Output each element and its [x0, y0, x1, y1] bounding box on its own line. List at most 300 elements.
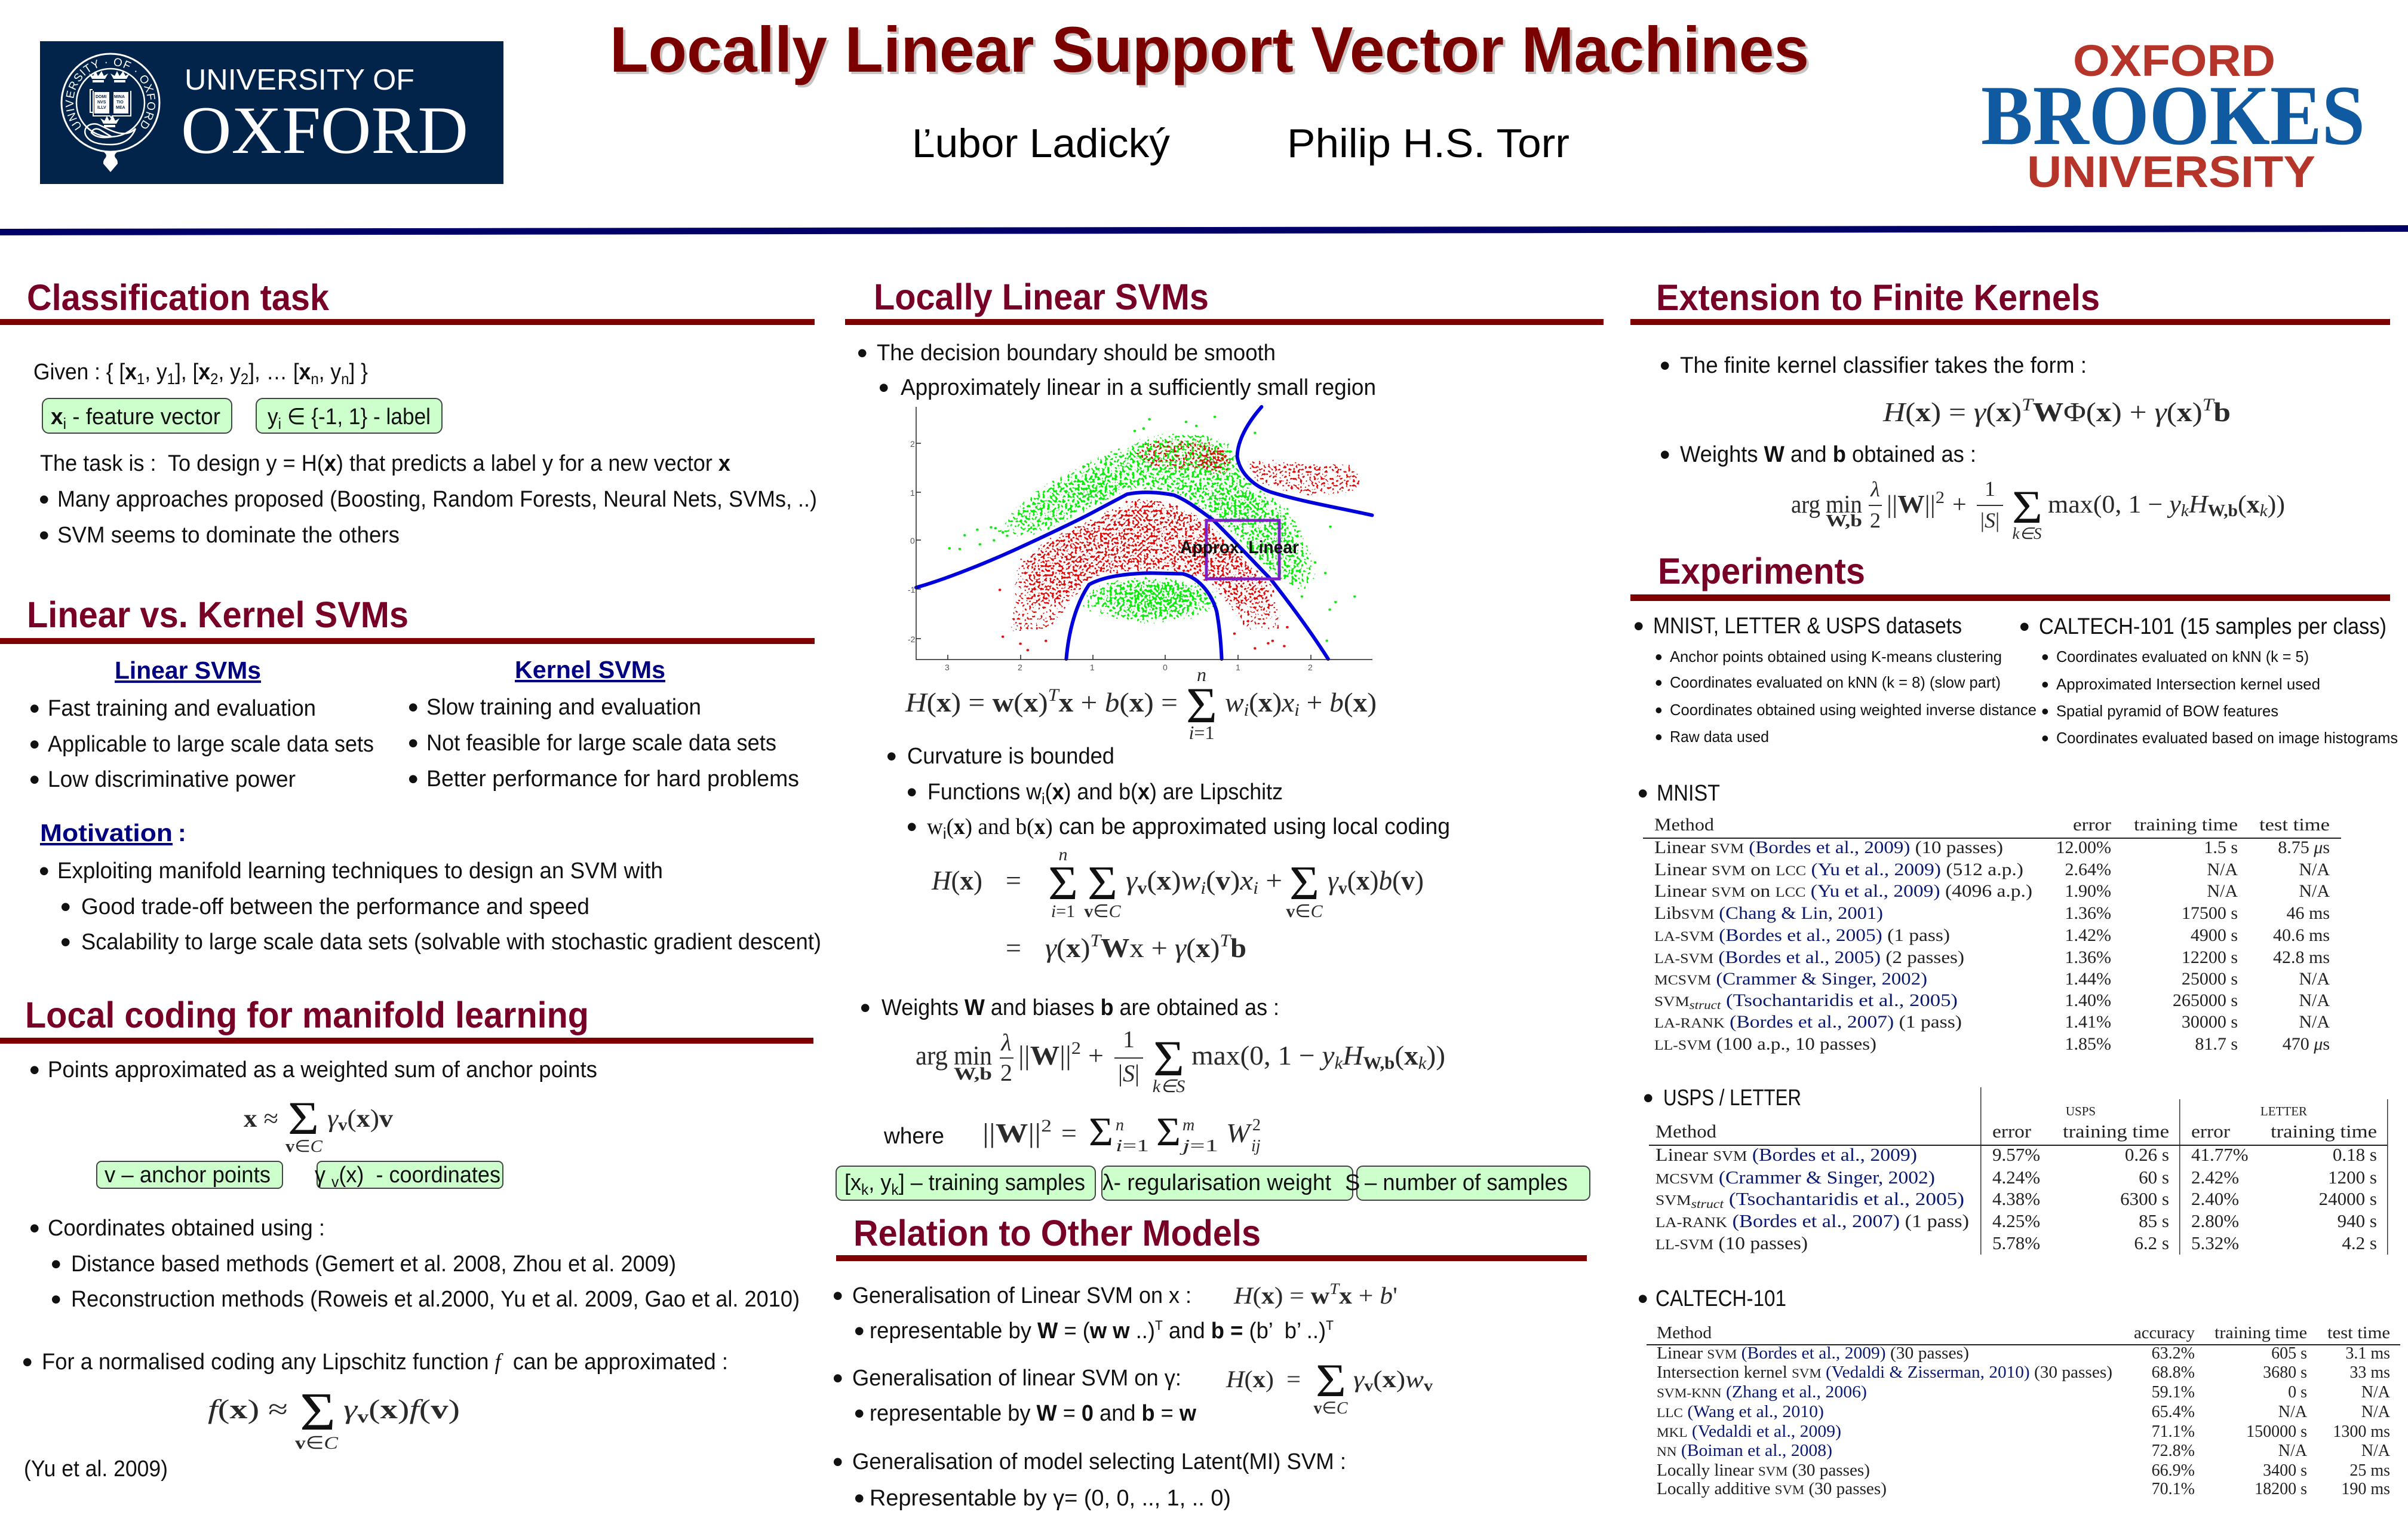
table: USPS and LETTER results: 2.40%	[2191, 1188, 2239, 1209]
formula: x approx: Σ	[288, 1092, 319, 1144]
formula: H(x) local coding: =	[1006, 933, 1021, 963]
formula: H(x) local coding: n	[1058, 845, 1068, 864]
formula: H(x) local coding: Σ	[1048, 857, 1078, 910]
formula: H(x) locally linear: i	[1244, 700, 1249, 720]
column: Kernel SVMs: •	[408, 726, 419, 760]
list: MNIST, LETTER and USPS datasets: Coordinates evaluated on kNN (k = 8) (slow part)	[1670, 673, 2001, 691]
given data text: ] }	[349, 360, 368, 385]
table: CALTECH-101 results: training time	[2214, 1324, 2307, 1342]
column: Kernel SVMs	[408, 656, 799, 796]
formula: objective: ||W||	[1018, 1040, 1071, 1071]
item: latent SVM: •	[833, 1445, 843, 1479]
chart: scatter plot with decision boundary: 0	[1163, 663, 1168, 672]
item: linear SVM on x: T	[1155, 1318, 1163, 1333]
bullets: curvature: i	[943, 824, 947, 842]
formula: H(x) locally linear: i=1	[1189, 722, 1214, 743]
bullets: curvature: i	[1042, 790, 1045, 808]
bullet: normalised coding: For a normalised coding any Lipschitz function f can be approximated :	[42, 1350, 728, 1375]
motivation	[39, 819, 821, 959]
formula: H(x) local coding: v	[1338, 878, 1347, 898]
formula: x approx: v	[338, 1116, 347, 1134]
formula: norm definition: Σ	[1089, 1109, 1113, 1154]
formula: H(x) local coding: x + γ(x)	[1129, 933, 1220, 963]
item: linear SVM on gamma: x)w	[1383, 1366, 1421, 1393]
table: MNIST results: 470 μs	[2283, 1034, 2330, 1054]
callout: feature vector	[42, 398, 232, 433]
table: MNIST results: 265000 s	[2173, 991, 2238, 1010]
formula: H(x) local coding: T	[1220, 931, 1232, 950]
table: USPS and LETTER results: 4.25%	[1992, 1210, 2040, 1231]
table: CALTECH-101 results: N/A	[2361, 1442, 2391, 1460]
table: CALTECH-101 results: 71.1%	[2152, 1422, 2195, 1441]
motivation: Good trade-off between the performance and speed	[81, 894, 589, 919]
table: USPS and LETTER results: MCSVM (Crammer & Singer, 2002)	[1656, 1167, 1935, 1188]
formula: H(x) local coding: v∈C	[1286, 901, 1323, 921]
table: MNIST results: SVM	[1654, 994, 1690, 1010]
table: MNIST results: 1.44%	[2065, 969, 2111, 989]
formula: finite kernel objective: W,b	[1826, 512, 1862, 531]
formula: norm definition: i=1	[1116, 1137, 1149, 1155]
formula: finite kernel objective: k∈S	[2012, 525, 2042, 542]
list: CALTECH-101 setup: Coordinates evaluated on kNN (k = 5)	[2056, 648, 2309, 666]
column: Linear SVMs: Low discriminative power	[48, 767, 296, 792]
table: CALTECH-101 results: 3680 s	[2263, 1363, 2307, 1382]
item: linear SVM on gamma: v	[1424, 1377, 1433, 1394]
formula: norm definition: 2	[1041, 1116, 1052, 1136]
table: USPS and LETTER results: training time	[2063, 1121, 2169, 1142]
item: linear SVM on x: x	[1339, 1282, 1352, 1309]
table: CALTECH-101 results: Linear SVM (Bordes et al., 2009) (30 passes)	[1657, 1344, 1969, 1363]
formula: finite kernel objective: 2	[1936, 489, 1945, 507]
logo: Oxford Brookes University: OXFORD	[2073, 36, 2275, 85]
motivation: Motivation	[40, 819, 173, 847]
heading: Extension to Finite Kernels: Extension to Finite Kernels	[1656, 277, 2100, 318]
table: MNIST results: 1.36%	[2065, 903, 2111, 923]
item: linear SVM on gamma: •	[833, 1362, 843, 1395]
column: Linear SVMs: Applicable to large scale data sets	[48, 732, 374, 757]
bullets: decision boundary: •	[857, 336, 868, 370]
bullet: points approximated: •	[29, 1053, 40, 1087]
table: USPS and LETTER results: 6.2 s	[2134, 1232, 2169, 1253]
chart: scatter plot with decision boundary: 2	[1018, 663, 1022, 672]
logo: University of Oxford: UNIVERSITY OF	[185, 64, 414, 96]
task statement: The task is : To design y = H(x) that predicts a label y for a new vector x	[40, 451, 730, 476]
heading: Locally Linear SVMs: Locally Linear SVMs	[874, 277, 1209, 317]
formula: norm definition: Σ	[1156, 1109, 1181, 1154]
table: MNIST results: N/A	[2299, 881, 2330, 901]
table: MNIST results: LA-SVM (Bordes et al., 2005) (2 passes)	[1654, 947, 1964, 967]
column: Linear SVMs: •	[29, 763, 40, 796]
bullets: coordinates obtained: •	[51, 1247, 62, 1281]
formula: norm definition: =	[1061, 1118, 1077, 1148]
item: linear SVM on x: H(x) = w	[1234, 1282, 1328, 1309]
title: Locally Linear Support Vector Machines	[612, 16, 1811, 88]
formula: norm definition: n	[1116, 1116, 1124, 1134]
table: CALTECH-101 results: 68.8%	[2152, 1363, 2195, 1382]
formula: norm definition: ||W||	[982, 1118, 1039, 1148]
formula: finite kernel: T	[2022, 395, 2034, 415]
formula: H(x) local coding: W	[1101, 933, 1129, 963]
table: USPS and LETTER results: 4.2 s	[2342, 1232, 2377, 1253]
bullet list	[39, 483, 817, 552]
formula: x approx: x ≈	[244, 1105, 278, 1133]
formula: H(x) local coding: i	[1200, 878, 1206, 898]
formula: H(x) local coding: =	[1006, 865, 1021, 896]
table: CALTECH-101 results: MKL (Vedaldi et al., 2009)	[1657, 1422, 1841, 1441]
formula: f(x) approx: γ	[343, 1394, 358, 1424]
table: USPS and LETTER results	[1649, 1087, 2388, 1255]
table: MNIST results: MCSVM (Crammer & Singer, 2002)	[1654, 969, 1927, 989]
formula: finite kernel: H(x) = γ(x)	[1883, 397, 2020, 427]
bullet list: •	[39, 483, 50, 516]
bullet: points approximated: Points approximated as a weighted sum of anchor points	[48, 1057, 597, 1083]
formula: finite kernel objective: W,b	[2208, 502, 2238, 520]
authors: Philip H.S. Torr	[1287, 121, 1570, 166]
bullets: curvature: Curvature is bounded	[907, 744, 1114, 769]
list: MNIST, LETTER and USPS datasets: •	[1655, 645, 1663, 669]
logo: Oxford Brookes University	[1981, 36, 2365, 197]
bullets: curvature	[886, 740, 1450, 844]
table: CALTECH-101 results: 190 ms	[2341, 1480, 2390, 1498]
heading: Classification task: Classification task	[27, 277, 329, 318]
formula: x approx: (	[347, 1105, 357, 1133]
column: Linear SVMs	[29, 657, 374, 796]
formula: f(x) approx: Σ	[300, 1382, 336, 1442]
table: MNIST results: 42.8 ms	[2273, 947, 2330, 967]
bullet: normalised coding: •	[22, 1345, 33, 1379]
formula: objective: x	[1404, 1040, 1418, 1071]
label: MNIST	[1638, 777, 1720, 810]
bullets: decision boundary: •	[879, 371, 889, 404]
callout: number of samples: – number of samples	[1365, 1170, 1568, 1195]
formula: objective: |S|	[1118, 1060, 1140, 1087]
callout: label: y	[268, 404, 279, 430]
chart: scatter plot with decision boundary: -1	[908, 585, 916, 594]
formula: H(x) local coding: T	[1090, 931, 1102, 950]
table: MNIST results: 1.90%	[2065, 881, 2111, 901]
item: linear SVM on gamma: Σ	[1316, 1354, 1346, 1406]
formula: H(x) local coding: +	[1258, 865, 1282, 896]
table: USPS and LETTER results: 4.38%	[1992, 1188, 2040, 1209]
item: linear SVM on gamma: γ	[1353, 1366, 1365, 1393]
bullets: curvature: w	[927, 814, 943, 839]
callout: training samples: k	[861, 1180, 869, 1198]
formula: finite kernel objective: λ	[1870, 477, 1880, 501]
table: MNIST results: 40.6 ms	[2273, 925, 2330, 945]
table: MNIST results: Linear SVM on LCC (Yu et al., 2009) (512 a.p.)	[1654, 860, 2023, 879]
item: linear SVM on gamma	[833, 1354, 1433, 1430]
callout: number of samples	[1345, 1166, 1590, 1200]
table: USPS and LETTER results: LETTER	[2260, 1104, 2307, 1118]
callout: feature vector: i	[63, 415, 66, 433]
table: USPS and LETTER results: LL-SVM (10 passes)	[1656, 1232, 1808, 1253]
table: MNIST results: 1.41%	[2065, 1012, 2111, 1032]
panel: Linear vs. Kernel SVMs	[0, 594, 821, 959]
item: latent SVM: •	[854, 1482, 865, 1515]
table: USPS and LETTER results: (Tsochantaridis et al., 2005)	[1729, 1188, 1964, 1209]
table: MNIST results: error	[2073, 815, 2111, 835]
item: latent SVM: Representable by γ= (0, 0, .., 1, .. 0)	[870, 1486, 1231, 1511]
table: MNIST results: Linear SVM (Bordes et al., 2009) (10 passes)	[1654, 838, 2003, 857]
table: CALTECH-101 results: N/A	[2361, 1403, 2391, 1421]
formula: finite kernel objective: k	[2181, 502, 2189, 520]
callout: label: i	[278, 415, 281, 433]
table: MNIST results: N/A	[2299, 991, 2330, 1010]
chart: scatter plot with decision boundary: -2	[908, 634, 916, 644]
bullets: curvature: •	[907, 775, 917, 809]
icon: Oxford crest: ILLV	[97, 106, 106, 110]
given data text: ], [	[175, 360, 199, 385]
table: CALTECH-101 results: Locally additive SVM (30 passes)	[1657, 1480, 1887, 1498]
callout: label	[256, 398, 442, 433]
bullet: classifier form: •	[1660, 349, 1670, 382]
formula: norm definition: m	[1182, 1116, 1194, 1134]
formula: f(x) approx: f(x) ≈	[208, 1394, 288, 1424]
formula: f(x) approx: v∈C	[295, 1433, 339, 1453]
formula: H(x) locally linear: +	[1300, 687, 1329, 717]
list: MNIST, LETTER and USPS datasets: MNIST, LETTER & USPS datasets	[1653, 614, 1962, 639]
panel: Extension to Finite Kernels	[1630, 277, 2390, 542]
item: linear SVM on gamma: •	[854, 1397, 865, 1430]
formula: H(x) locally linear: (	[1249, 687, 1258, 717]
table: USPS and LETTER results: 5.32%	[2191, 1232, 2239, 1253]
title: Locally Linear Support Vector Machines	[610, 13, 1809, 85]
formula: objective: arg	[916, 1040, 948, 1071]
table: CALTECH-101 results: 0 s	[2288, 1383, 2307, 1402]
given data text: x	[198, 360, 210, 385]
bullet list: SVM seems to dominate the others	[57, 523, 400, 548]
bullets: curvature: •	[907, 810, 917, 844]
callout: regularisation weight: λ- regularisation weight	[1102, 1170, 1331, 1195]
bullets: curvature: x) and b(x) can be approximated using local coding	[954, 814, 1458, 839]
table: MNIST results: 12200 s	[2182, 947, 2238, 967]
formula: objective: (	[1395, 1040, 1404, 1071]
label: MNIST: •	[1638, 777, 1648, 810]
bullet: weights and biases: •	[860, 991, 871, 1025]
label: CALTECH-101: CALTECH-101	[1656, 1286, 1786, 1311]
item: linear SVM on gamma: v	[1364, 1377, 1373, 1394]
item: linear SVM on x	[833, 1279, 1398, 1348]
table: MNIST results: test time	[2259, 815, 2330, 835]
table: MNIST results: LibSVM (Chang & Lin, 2001)	[1654, 903, 1883, 923]
table: MNIST results: 1.36%	[2065, 947, 2111, 967]
table: USPS and LETTER results: 6300 s	[2120, 1188, 2169, 1209]
list: CALTECH-101 setup: Approximated Intersection kernel used	[2056, 675, 2320, 693]
table: MNIST results: 81.7 s	[2195, 1034, 2238, 1054]
column: Kernel SVMs: Better performance for hard problems	[426, 766, 799, 792]
given data text: 2	[241, 370, 248, 388]
motivation: Scalability to large scale data sets (solvable with stochastic gradient descent)	[81, 930, 821, 955]
table: CALTECH-101 results: NN (Boiman et al., 2008)	[1657, 1442, 1832, 1460]
given data text: ], … [	[248, 360, 299, 385]
table: CALTECH-101 results: Intersection kernel SVM (Vedaldi & Zisserman, 2010) (30 passes)	[1657, 1363, 2112, 1382]
table: USPS and LETTER results: 41.77%	[2191, 1144, 2249, 1165]
bullets: decision boundary	[857, 336, 1376, 404]
logo: Oxford Brookes University: UNIVERSITY	[2027, 147, 2315, 197]
table: USPS and LETTER results: SVM	[1656, 1192, 1691, 1209]
column: Kernel SVMs: •	[408, 691, 419, 724]
icon: Oxford crest: MEA	[116, 106, 125, 110]
chart: scatter plot with decision boundary: 1	[1090, 663, 1095, 672]
bullet: weights and biases: Weights W and biases b are obtained as :	[882, 995, 1279, 1020]
table: MNIST results: 46 ms	[2286, 903, 2330, 923]
formula: objective	[916, 1026, 1445, 1096]
callout: feature vector: - feature vector	[66, 404, 220, 430]
list: MNIST, LETTER and USPS datasets: •	[1655, 725, 1663, 749]
formula: norm definition: 2	[1252, 1116, 1261, 1134]
table: USPS and LETTER results: USPS	[2066, 1104, 2096, 1118]
formula: objective: 1	[1123, 1026, 1135, 1053]
label: USPS / LETTER: •	[1643, 1081, 1654, 1115]
panel: Classification task	[0, 277, 817, 552]
formula: finite kernel objective: |S|	[1980, 508, 2000, 532]
table: MNIST results: 25000 s	[2182, 969, 2238, 989]
table: MNIST results: N/A	[2299, 1012, 2330, 1032]
formula: H(x) locally linear: H(x) = w(x)	[905, 687, 1048, 717]
item: linear SVM on x: Generalisation of Linear SVM on x :	[852, 1283, 1191, 1308]
bullets: coordinates obtained: Coordinates obtained using :	[48, 1216, 325, 1241]
formula: objective: k	[1335, 1053, 1343, 1073]
list: CALTECH-101 setup: •	[2041, 672, 2049, 697]
table: USPS and LETTER results: 1200 s	[2328, 1167, 2377, 1188]
item: linear SVM on x: •	[833, 1279, 843, 1313]
formula: x approx: γ	[327, 1105, 339, 1133]
given data text: n	[311, 370, 319, 388]
heading: Linear vs. Kernel SVMs: Linear vs. Kernel SVMs	[27, 594, 408, 635]
chart: scatter plot with decision boundary: 1	[910, 488, 915, 498]
formula: objective: k	[1418, 1053, 1427, 1073]
formula: objective: k∈S	[1153, 1077, 1185, 1096]
table: MNIST results: N/A	[2299, 969, 2330, 989]
bullets: coordinates obtained: Distance based methods (Gemert et al. 2008, Zhou et al. 2009)	[71, 1252, 676, 1277]
formula: norm definition	[883, 1109, 1261, 1155]
formula: H(x) local coding: x)b(v)	[1356, 865, 1424, 896]
list: CALTECH-101 setup: •	[2041, 726, 2049, 750]
table: CALTECH-101 results: N/A	[2278, 1403, 2308, 1421]
panel: Experiments	[1630, 551, 2400, 1498]
column: Linear SVMs: Linear SVMs	[115, 657, 261, 684]
panel: Relation to Other Models	[833, 1213, 1587, 1515]
table: CALTECH-101 results: 70.1%	[2152, 1480, 2195, 1498]
callout: label: ∈ {-1, 1} - label	[281, 404, 431, 430]
icon: Oxford crest: DOMI	[96, 95, 106, 99]
table: CALTECH-101 results: N/A	[2278, 1442, 2308, 1460]
formula: objective: H	[1342, 1040, 1365, 1071]
icon: Oxford crest: NVS	[97, 100, 106, 105]
formula: H(x) local coding: (	[1206, 865, 1216, 896]
icon: Oxford crest: TIO	[116, 100, 124, 105]
formula: objective: 2	[1000, 1059, 1012, 1086]
formula: finite kernel objective: x	[2247, 491, 2260, 519]
formula: H(x) local coding: (	[1347, 865, 1356, 896]
table: CALTECH-101 results: 1300 ms	[2333, 1422, 2390, 1441]
table: MNIST results: (Tsochantaridis et al., 2005)	[1726, 991, 1958, 1010]
table: MNIST results: 2.64%	[2065, 860, 2111, 879]
given data text: Given : { [x	[33, 360, 137, 385]
table: MNIST results: LA-SVM (Bordes et al., 2005) (1 pass)	[1654, 925, 1950, 945]
chart: scatter plot with decision boundary: 2	[1308, 663, 1313, 672]
column: Linear SVMs: Fast training and evaluation	[48, 696, 316, 721]
formula: objective: 2	[1071, 1038, 1081, 1058]
table: USPS and LETTER results: 85 s	[2139, 1210, 2169, 1231]
label: CALTECH-101	[1638, 1282, 1786, 1316]
bullets: coordinates obtained	[29, 1212, 800, 1316]
table: CALTECH-101 results: 25 ms	[2349, 1461, 2390, 1480]
table: MNIST results: 4900 s	[2191, 925, 2238, 945]
chart: scatter plot with decision boundary	[908, 407, 1372, 672]
logo: University of Oxford: OXFORD	[181, 93, 468, 168]
formula: H(x) local coding: γ	[1328, 865, 1340, 896]
table: CALTECH-101 results: 72.8%	[2152, 1442, 2195, 1460]
bullet: classifier form	[1660, 349, 2087, 382]
formula: x approx	[244, 1092, 393, 1156]
table: MNIST results: 17500 s	[2182, 903, 2238, 923]
table: MNIST results: 12.00%	[2056, 838, 2111, 857]
list: MNIST, LETTER and USPS datasets: •	[1655, 698, 1663, 722]
callout: training samples: ] – training samples	[899, 1170, 1085, 1195]
given data text: 1	[137, 370, 145, 388]
given data text: , y	[145, 360, 167, 385]
list: CALTECH-101 setup: •	[2019, 610, 2030, 643]
table: CALTECH-101 results: SVM-KNN (Zhang et al., 2006)	[1657, 1383, 1867, 1402]
item: linear SVM on x: b = (b’ b’ ..)	[1211, 1318, 1329, 1344]
item: linear SVM on gamma: H(x) =	[1226, 1366, 1301, 1393]
table: USPS and LETTER results: 2.80%	[2191, 1210, 2239, 1231]
formula: x approx: x)v	[357, 1105, 392, 1133]
table: USPS and LETTER results: 2.42%	[2191, 1167, 2239, 1188]
formula: H(x) locally linear: + b(x) =	[1080, 687, 1175, 717]
table: MNIST results: struct	[1690, 999, 1721, 1012]
formula: H(x) local coding: (	[1147, 865, 1157, 896]
icon: Oxford crest	[61, 53, 160, 172]
callout: coordinates: (x) - coordinates	[339, 1163, 500, 1188]
logo: Oxford Brookes University: BROOKES	[1981, 68, 2365, 162]
table: USPS and LETTER results: error	[1992, 1121, 2032, 1142]
item: linear SVM on x: •	[854, 1314, 865, 1348]
formula: finite kernel objective	[1791, 477, 2285, 542]
chart: scatter plot with decision boundary: 2	[910, 439, 915, 449]
table: CALTECH-101 results: 150000 s	[2246, 1422, 2307, 1441]
table: USPS and LETTER results: Linear SVM (Bordes et al., 2009)	[1656, 1144, 1917, 1165]
citation: (Yu et al. 2009)	[24, 1456, 168, 1482]
table: USPS and LETTER results: 60 s	[2139, 1167, 2169, 1188]
formula: H(x) local coding: Σ	[1289, 857, 1319, 910]
table: USPS and LETTER results: 940 s	[2338, 1210, 2377, 1231]
icon: Oxford crest: UNIVERSITY · OF · OXFORD	[66, 58, 155, 130]
formula: finite kernel objective: 1	[1985, 477, 1995, 501]
item: linear SVM on x: + b'	[1358, 1282, 1397, 1309]
table: CALTECH-101 results: Locally linear SVM (30 passes)	[1657, 1461, 1870, 1480]
formula: finite kernel objective: max(0, 1 − y	[2048, 491, 2180, 519]
table: CALTECH-101 results	[1647, 1324, 2400, 1498]
list: MNIST, LETTER and USPS datasets	[1633, 609, 2037, 749]
table: MNIST results: 8.75 μs	[2278, 838, 2330, 857]
callout: training samples: [x	[844, 1170, 862, 1195]
table: CALTECH-101 results: 63.2%	[2152, 1344, 2195, 1363]
table: USPS and LETTER results: Method	[1656, 1121, 1717, 1142]
table: USPS and LETTER results: struct	[1691, 1197, 1724, 1211]
list: CALTECH-101 setup: •	[2041, 699, 2049, 723]
formula: finite kernel objective: 2	[1870, 508, 1881, 532]
formula: norm definition: ij	[1251, 1137, 1261, 1155]
table: MNIST results: 1.85%	[2065, 1034, 2111, 1054]
formula: f(x) approx: x)f(v)	[380, 1394, 457, 1424]
table: MNIST results: N/A	[2207, 881, 2238, 901]
table: USPS and LETTER results: 9.57%	[1992, 1144, 2040, 1165]
formula: H(x) locally linear: x)x	[1258, 687, 1294, 717]
list: CALTECH-101 setup: Spatial pyramid of BOW features	[2056, 702, 2278, 720]
table: CALTECH-101 results: test time	[2327, 1324, 2390, 1342]
